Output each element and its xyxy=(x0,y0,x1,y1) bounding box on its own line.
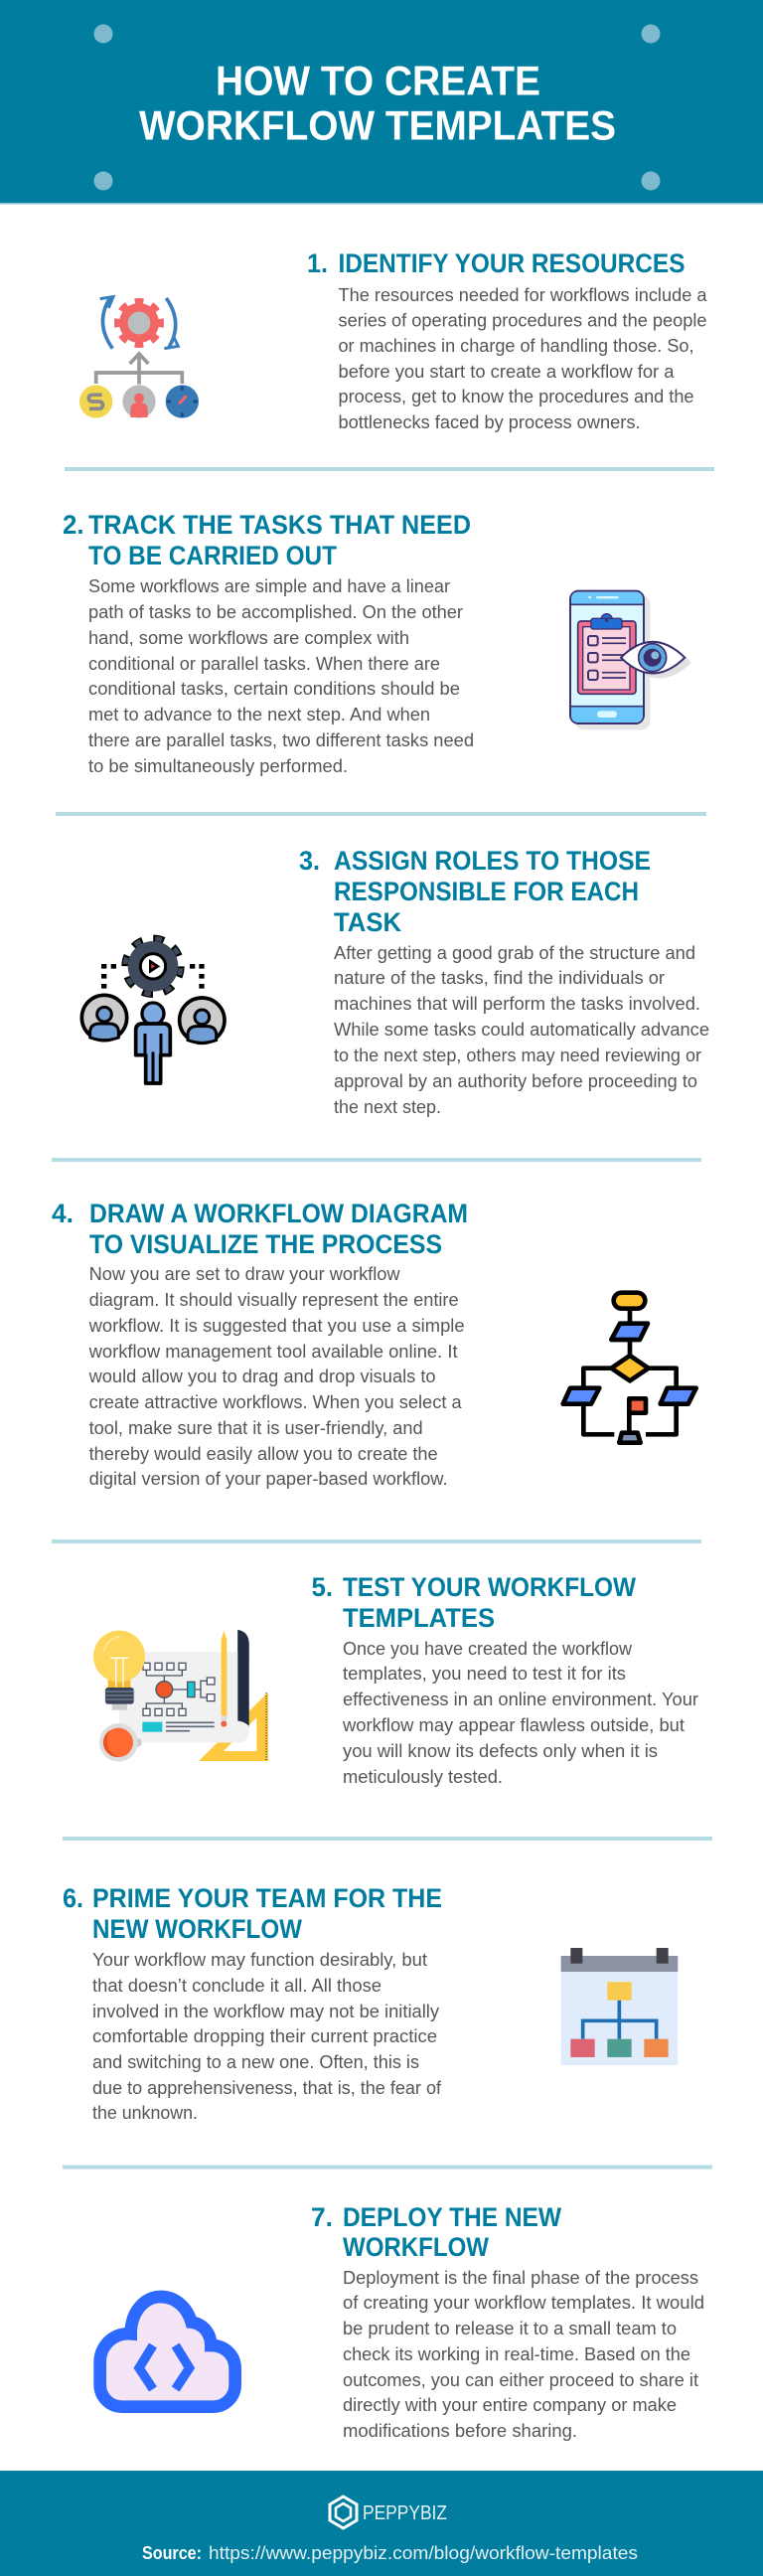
body text: hand, some workflows are complex with xyxy=(88,628,409,648)
heading: TO BE CARRIED OUT xyxy=(88,541,337,570)
body text: approval by an authority before proceeding to xyxy=(334,1071,697,1091)
body text: be prudent to release it to a small team to xyxy=(343,2319,677,2338)
body text: of creating your workflow templates. It would xyxy=(343,2293,704,2313)
body text: would allow you to drag and drop visuals to xyxy=(88,1367,436,1386)
body text: the next step. xyxy=(334,1097,441,1117)
body text: series of operating procedures and the people xyxy=(338,310,707,330)
section 4: draw a workflow diagram xyxy=(52,1199,696,1489)
body text: comfortable dropping their current practice xyxy=(92,2026,437,2046)
heading: 7. xyxy=(311,2202,333,2232)
body text: process, get to know the procedures and the xyxy=(338,387,693,406)
section 7: deploy xyxy=(100,2202,704,2441)
body text: thereby would easily allow you to create the xyxy=(89,1444,438,1464)
heading: 3. xyxy=(299,846,320,876)
body text: create attractive workflows. When you select a xyxy=(89,1392,463,1412)
title: WORKFLOW TEMPLATES xyxy=(139,101,616,149)
body text: machines that will perform the tasks involved. xyxy=(334,994,700,1014)
source line: Source: xyxy=(142,2543,202,2563)
body text: tool, make sure that it is user-friendly, and xyxy=(89,1418,423,1438)
heading: NEW WORKFLOW xyxy=(92,1914,302,1944)
heading xyxy=(299,846,651,937)
body text: digital version of your paper-based workflow. xyxy=(89,1469,448,1489)
icon: flowchart xyxy=(563,1293,696,1443)
body text xyxy=(334,943,709,1117)
icon: phone checklist with eye xyxy=(570,591,691,729)
heading: 4. xyxy=(52,1199,74,1228)
heading xyxy=(311,2202,561,2262)
heading: PRIME YOUR TEAM FOR THE xyxy=(92,1883,442,1913)
body text: Your workflow may function desirably, but xyxy=(92,1950,427,1970)
body text: Deployment is the final phase of the process xyxy=(343,2268,698,2288)
heading: DRAW A WORKFLOW DIAGRAM xyxy=(89,1199,468,1228)
source line: https://www.peppybiz.com/blog/workflow-templates xyxy=(209,2543,638,2563)
body text: workflow may appear flawless outside, but xyxy=(342,1715,685,1735)
body text: before you start to create a workflow for a xyxy=(338,362,676,382)
heading: ASSIGN ROLES TO THOSE xyxy=(334,846,651,876)
heading: RESPONSIBLE FOR EACH xyxy=(334,877,639,906)
title: HOW TO CREATE xyxy=(216,58,540,103)
heading: DEPLOY THE NEW xyxy=(343,2202,561,2232)
heading xyxy=(312,1572,636,1633)
icon: cloud code xyxy=(100,2297,235,2407)
body text: you will know its defects only when it is xyxy=(343,1741,658,1761)
heading: TRACK THE TASKS THAT NEED xyxy=(88,510,471,540)
body text xyxy=(342,1639,698,1787)
heading: 1. xyxy=(307,248,328,278)
body text: outcomes, you can either proceed to share it xyxy=(343,2370,698,2390)
icon: gear and team xyxy=(81,938,225,1083)
body text xyxy=(338,285,707,432)
body text xyxy=(92,1950,442,2123)
body text: Some workflows are simple and have a linear xyxy=(88,576,450,596)
heading: TEST YOUR WORKFLOW xyxy=(343,1572,636,1602)
body text: nature of the tasks, find the individuals or xyxy=(334,968,665,988)
body text: met to advance to the next step. And when xyxy=(88,705,430,724)
body text: conditional tasks, certain conditions should be xyxy=(88,679,460,699)
heading: TASK xyxy=(334,907,401,937)
body text: conditional or parallel tasks. When there are xyxy=(88,654,440,674)
brand name: PEPPYBIZ xyxy=(363,2502,447,2524)
heading: TEMPLATES xyxy=(343,1603,495,1633)
body text: due to apprehensiveness, that is, the fear of xyxy=(92,2078,442,2098)
body text: Now you are set to draw your workflow xyxy=(89,1264,401,1284)
body text: and switching to a new one. Often, this is xyxy=(92,2052,419,2072)
body text: there are parallel tasks, two different tasks need xyxy=(88,730,474,750)
body text: check its working in real-time. Based on the xyxy=(343,2344,690,2364)
body text xyxy=(88,1264,465,1489)
body text: involved in the workflow may not be initially xyxy=(92,2002,439,2021)
body text: modifications before sharing. xyxy=(343,2421,577,2441)
footer xyxy=(0,2471,763,2576)
heading: 5. xyxy=(312,1572,333,1602)
body text xyxy=(88,576,474,776)
body text: After getting a good grab of the structure and xyxy=(334,943,695,963)
body text: that doesn’t conclude it all. All those xyxy=(92,1976,382,1996)
icon: calendar org chart xyxy=(561,1948,678,2065)
section 2: track the tasks xyxy=(63,510,691,776)
header banner xyxy=(0,0,763,205)
body text: workflow. It is suggested that you use a simple xyxy=(88,1316,465,1336)
body text: to be simultaneously performed. xyxy=(88,756,348,776)
heading: TO VISUALIZE THE PROCESS xyxy=(89,1229,442,1259)
body text: the unknown. xyxy=(92,2103,198,2123)
body text: or machines in charge of handling those. So, xyxy=(338,336,693,356)
body text: meticulously tested. xyxy=(343,1767,503,1787)
heading: 6. xyxy=(63,1883,83,1913)
body text: workflow management tool available online. It xyxy=(88,1342,458,1362)
heading xyxy=(63,510,471,570)
heading: IDENTIFY YOUR RESOURCES xyxy=(338,248,686,278)
body text: effectiveness in an online environment. Your xyxy=(343,1690,698,1709)
body text: diagram. It should visually represent the entire xyxy=(89,1290,459,1310)
section 5: test your templates xyxy=(93,1572,698,1787)
body text: The resources needed for workflows include a xyxy=(338,285,707,305)
body text: bottlenecks faced by process owners. xyxy=(338,412,640,432)
title xyxy=(139,58,616,149)
heading: 2. xyxy=(63,510,83,540)
body text: While some tasks could automatically advance xyxy=(334,1020,709,1040)
body text xyxy=(343,2268,704,2441)
body text: to the next step, others may need reviewing or xyxy=(334,1046,701,1065)
heading: WORKFLOW xyxy=(343,2232,489,2262)
heading xyxy=(63,1883,442,1944)
icon: blueprint with lightbulb xyxy=(93,1630,268,1762)
body text: templates, you need to test it for its xyxy=(343,1664,626,1684)
section 1: identify your resources xyxy=(79,248,707,432)
section 6: prime your team xyxy=(63,1883,678,2123)
heading xyxy=(52,1199,468,1259)
section 3: assign roles xyxy=(81,846,709,1117)
icon: peppybiz logo xyxy=(330,2496,357,2528)
body text: directly with your entire company or make xyxy=(343,2395,677,2415)
body text: Once you have created the workflow xyxy=(343,1639,633,1659)
icon: gear with resources xyxy=(79,297,199,418)
body text: path of tasks to be accomplished. On the other xyxy=(88,602,463,622)
